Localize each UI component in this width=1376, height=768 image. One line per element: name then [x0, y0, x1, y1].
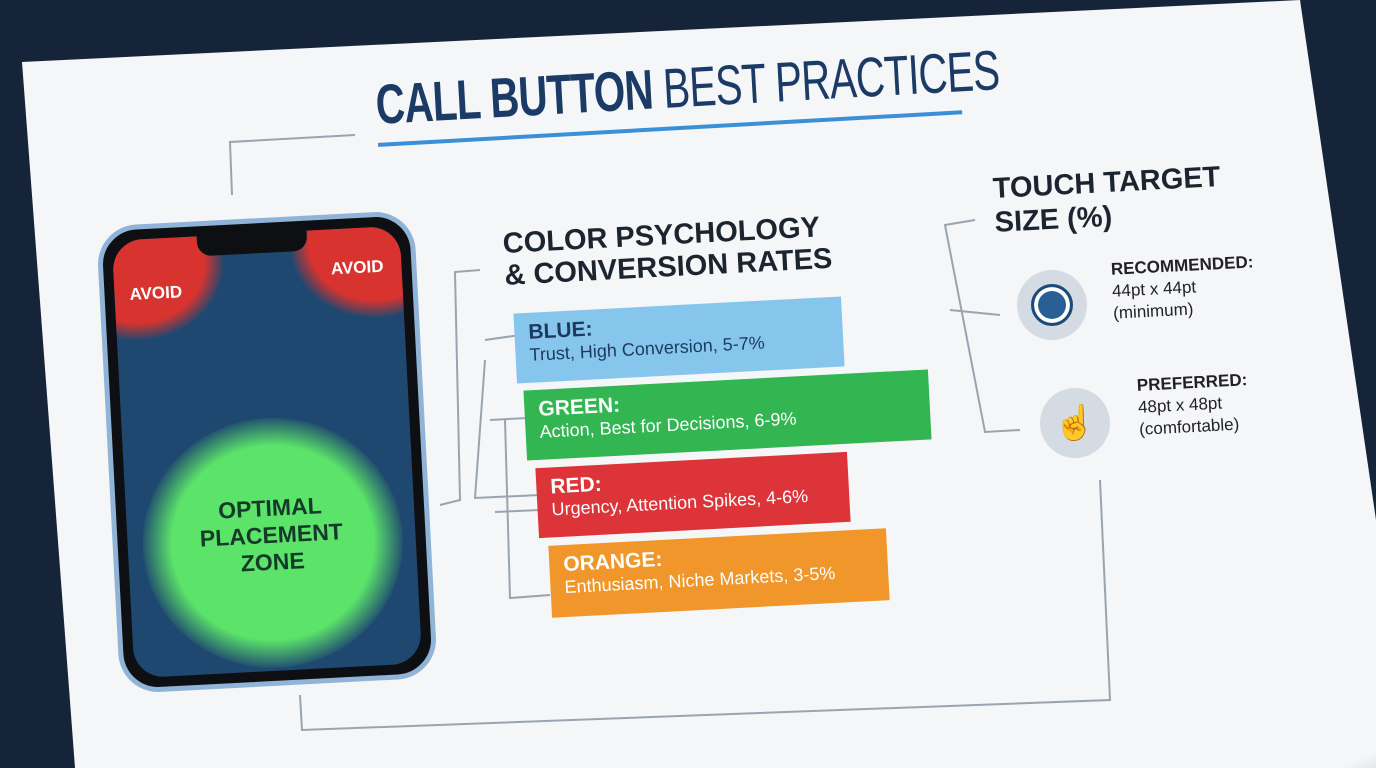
icon: recommended: [1017, 270, 1087, 340]
preferred text: (comfortable): [1139, 415, 1240, 439]
preferred text: [1136, 370, 1248, 439]
bar blue: Trust, High Conversion, 5-7%: [529, 333, 765, 365]
color psychology heading: & CONVERSION RATES: [504, 243, 833, 292]
recommended text: RECOMMENDED:: [1110, 252, 1254, 279]
phone: AVOID: [330, 257, 384, 278]
bar red: RED:: [550, 473, 602, 498]
preferred text: 48pt x 48pt: [1138, 394, 1223, 417]
bar green: Action, Best for Decisions, 6-9%: [539, 408, 797, 442]
phone: [96, 210, 438, 694]
connector lines: [230, 135, 1110, 730]
phone: AVOID: [129, 282, 183, 304]
recommended text: [1110, 252, 1254, 323]
phone: OPTIMAL: [218, 492, 322, 524]
bar orange: [548, 528, 890, 618]
icon: preferred: [1040, 388, 1110, 458]
preferred text: PREFERRED:: [1136, 370, 1248, 395]
color psychology heading: COLOR PSYCHOLOGY: [502, 211, 821, 260]
title: CALL BUTTON BEST PRACTICES: [374, 38, 1001, 136]
bar blue: BLUE:: [528, 318, 593, 344]
bar green: [523, 369, 932, 461]
recommended text: (minimum): [1113, 300, 1194, 323]
phone: ZONE: [240, 547, 305, 577]
bar red: Urgency, Attention Spikes, 4-6%: [551, 486, 809, 519]
icon: preferred: ☝: [1054, 404, 1096, 442]
bar red: [535, 452, 851, 538]
bar blue: [513, 296, 845, 384]
recommended text: 44pt x 44pt: [1112, 277, 1197, 301]
bar orange: ORANGE:: [563, 548, 663, 576]
bar green: GREEN:: [538, 394, 621, 421]
touch target heading: SIZE (%): [994, 201, 1113, 239]
phone: PLACEMENT: [199, 518, 343, 552]
touch target heading: [992, 161, 1221, 239]
bar orange: Enthusiasm, Niche Markets, 3-5%: [564, 563, 836, 597]
color psychology heading: [502, 211, 833, 292]
touch target heading: TOUCH TARGET: [992, 161, 1221, 205]
